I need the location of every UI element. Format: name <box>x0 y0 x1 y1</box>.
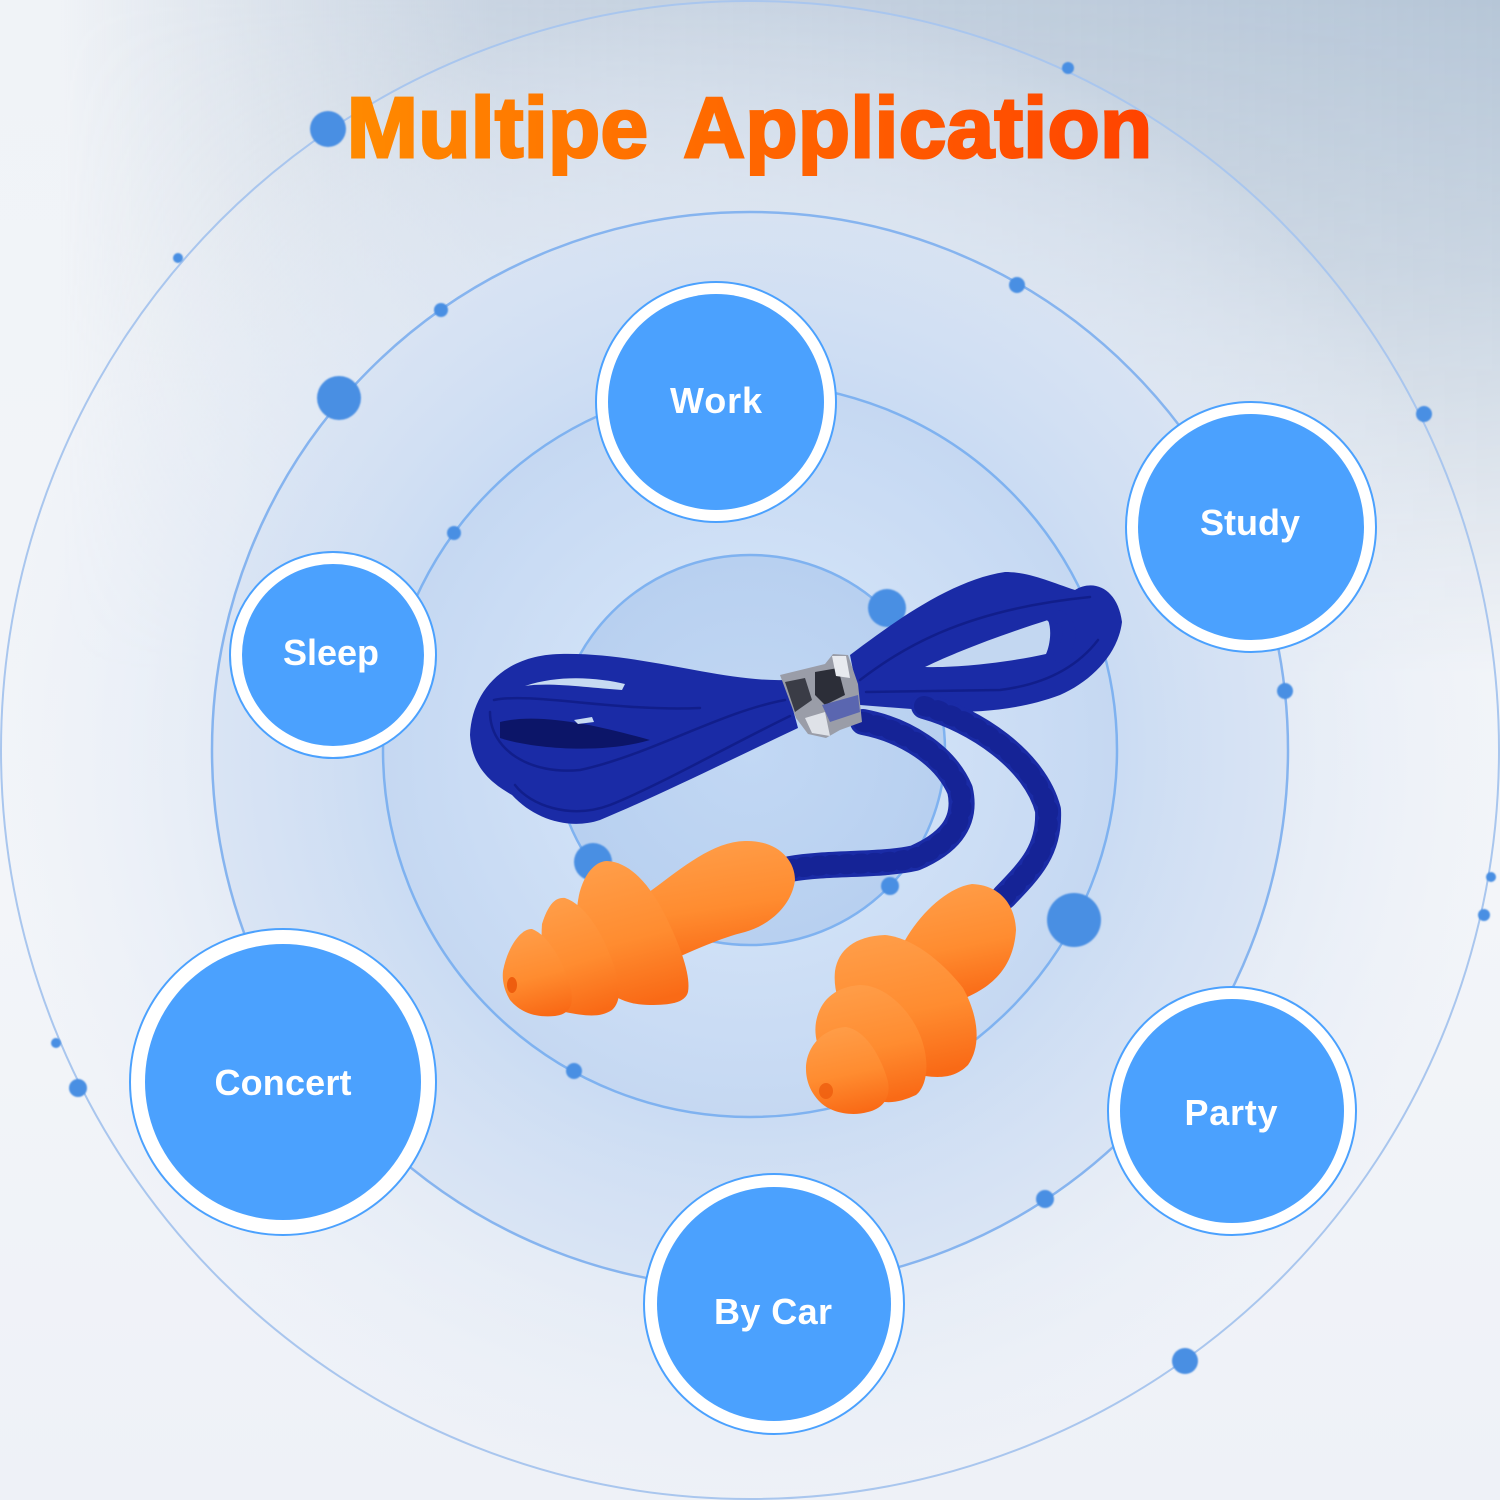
left earplug hole <box>507 977 517 993</box>
bubble: Concert <box>130 929 436 1235</box>
blue cord <box>470 572 1122 897</box>
right earplug hole <box>819 1083 833 1099</box>
bubble: Work <box>596 282 836 522</box>
metal clip <box>780 654 862 738</box>
right earplug <box>806 884 1016 1114</box>
bubble: By Car <box>644 1174 904 1434</box>
product: corded earplugs <box>470 572 1122 1114</box>
background <box>154 0 1500 564</box>
bubble: Sleep <box>230 552 436 758</box>
bubble: Study: Study <box>1200 502 1300 543</box>
bubble: Sleep: Sleep <box>283 632 379 673</box>
bubble: Concert: Concert <box>214 1062 352 1103</box>
title: Multipe Application <box>347 81 1152 176</box>
bubble: Party <box>1108 987 1356 1235</box>
bubble: Study <box>1126 402 1376 652</box>
bubble: By Car: By Car <box>714 1291 832 1332</box>
bubble: Party: Party <box>1184 1092 1278 1133</box>
left earplug <box>503 841 795 1016</box>
bubble: Work: Work <box>670 380 763 421</box>
